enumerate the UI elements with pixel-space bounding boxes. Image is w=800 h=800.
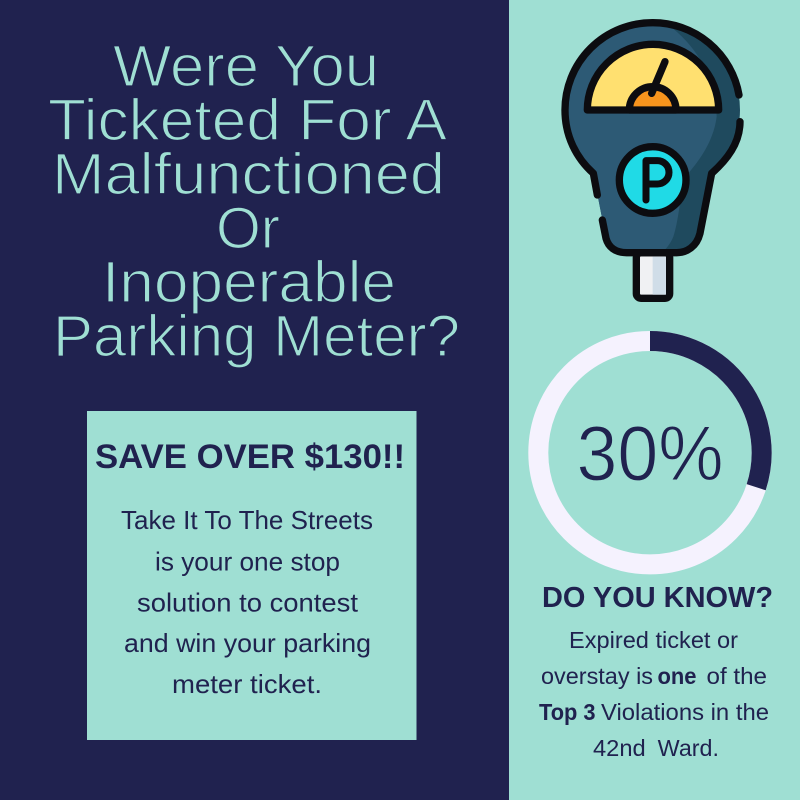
title xyxy=(48,34,460,369)
title: Ticketed For A xyxy=(48,88,447,153)
text block: violations fact: Top 3 xyxy=(539,699,596,725)
callout body text: is your one stop xyxy=(155,546,340,576)
text block: violations fact: 42nd xyxy=(593,735,646,761)
title: Inoperable xyxy=(102,250,396,315)
callout body text: meter ticket. xyxy=(172,669,322,699)
text block: violations fact: overstay is xyxy=(541,663,653,689)
text block: violations fact: Violations in the xyxy=(601,699,769,725)
gauge dial xyxy=(587,44,719,110)
meter outline xyxy=(565,23,740,253)
panel: savings callout xyxy=(87,411,416,740)
title: Or xyxy=(216,196,280,261)
text block: violations fact: one xyxy=(658,663,696,689)
donut value: 30% xyxy=(576,409,724,497)
meter body xyxy=(568,26,740,249)
text block: violations fact: of the xyxy=(706,663,767,689)
callout body text xyxy=(121,505,373,699)
heading: do you know: DO YOU KNOW? xyxy=(542,582,773,614)
icon: parking meter xyxy=(540,17,750,298)
text block: violations fact xyxy=(539,627,769,761)
title: Parking Meter? xyxy=(53,304,460,369)
text block: violations fact: Ward. xyxy=(658,735,719,761)
meter post xyxy=(636,253,670,298)
callout body text: and win your parking xyxy=(124,628,371,658)
callout body text: Take It To The Streets xyxy=(121,505,373,535)
callout heading: SAVE OVER $130!! xyxy=(95,438,405,476)
callout body text: solution to contest xyxy=(137,588,359,618)
text block: violations fact: Expired ticket or xyxy=(569,627,738,653)
title: Were You xyxy=(113,34,379,99)
P badge xyxy=(619,147,686,213)
panel: left background xyxy=(0,0,509,800)
chart: 30% donut xyxy=(538,341,762,564)
title: Malfunctioned xyxy=(52,142,445,207)
